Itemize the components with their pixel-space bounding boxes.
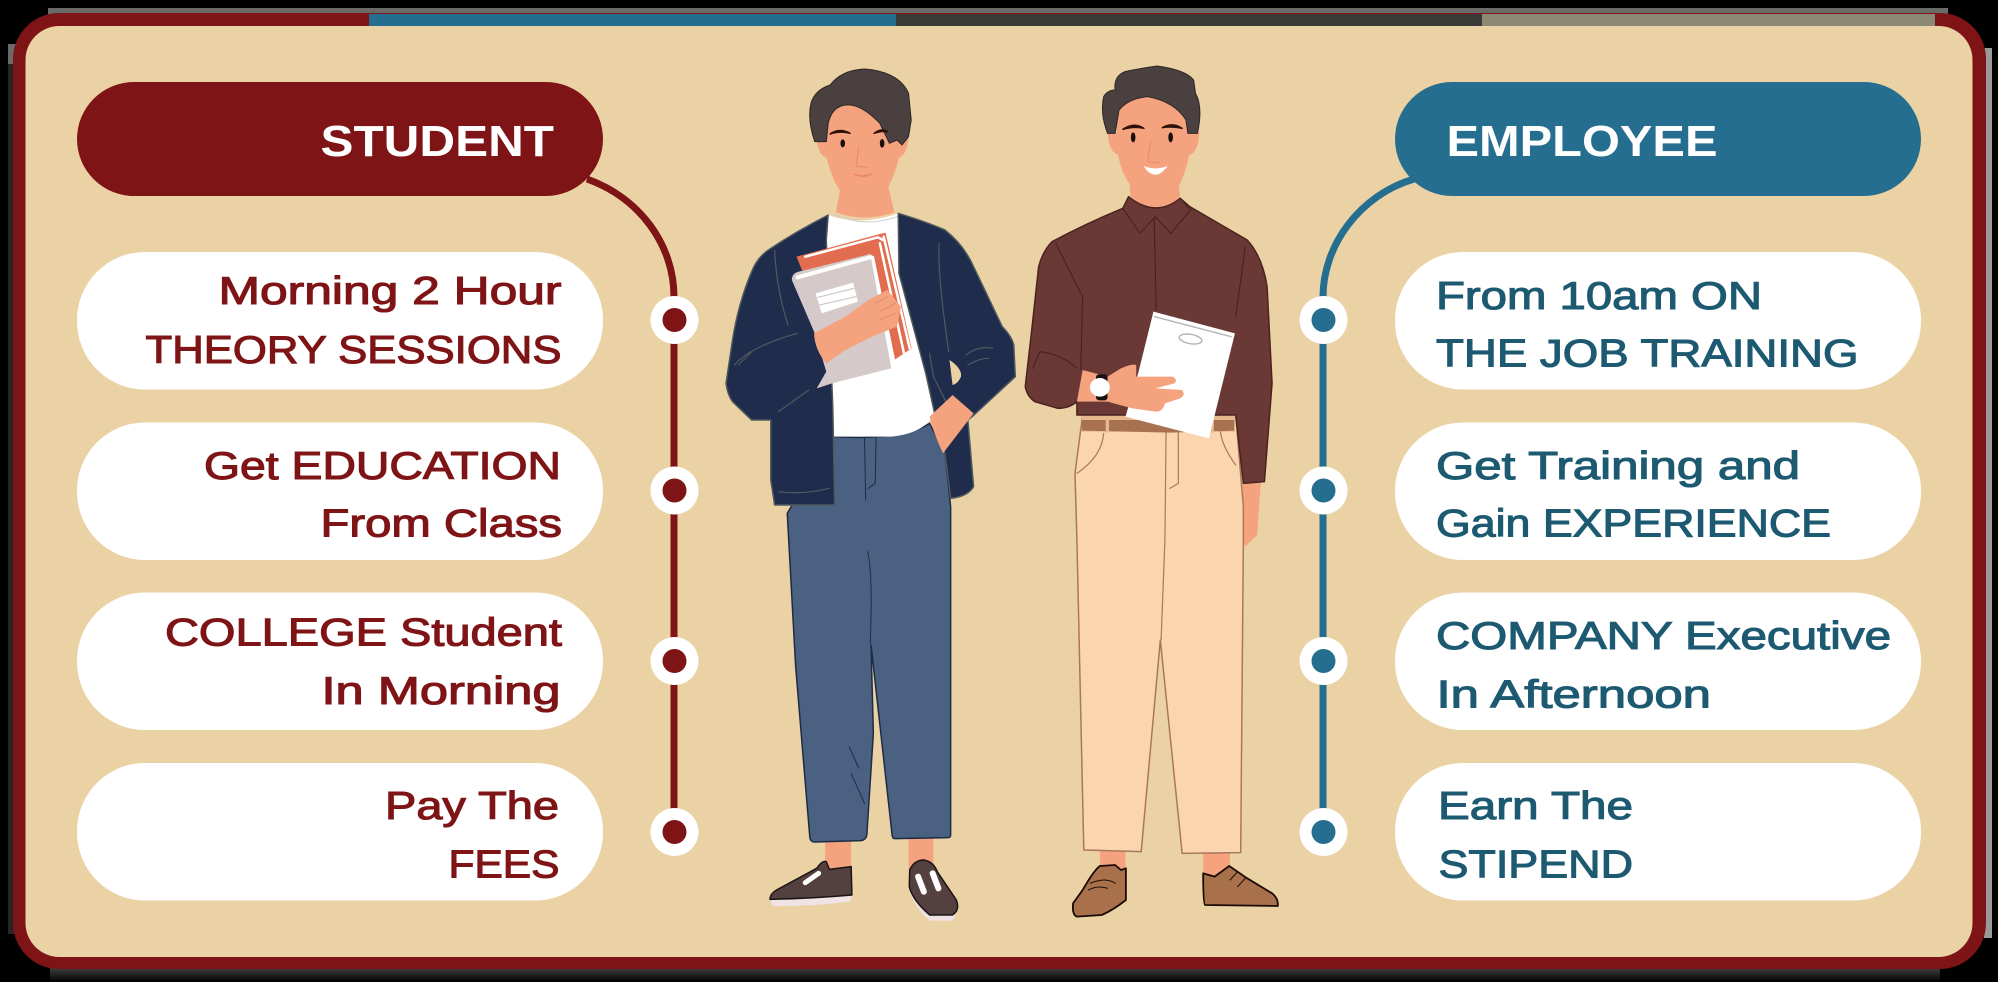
employee facial features xyxy=(1123,125,1182,175)
heading: STUDENT: STUDENT xyxy=(320,117,554,166)
employee left hand at side xyxy=(1243,480,1261,547)
jacket fold lines xyxy=(734,243,993,493)
employee item 4: Earn The xyxy=(1438,785,1633,828)
student jacket right xyxy=(898,213,1015,498)
employee ankles xyxy=(1100,848,1230,877)
student item 3: COLLEGE Student xyxy=(165,612,562,654)
employee notebook xyxy=(1126,312,1235,438)
employee belt xyxy=(1082,415,1235,433)
student trousers xyxy=(787,423,951,842)
employee left shoe xyxy=(1073,865,1126,917)
employee item 3: In Afternoon xyxy=(1436,674,1711,716)
employee connector line xyxy=(1323,179,1414,832)
heading: EMPLOYEE: EMPLOYEE xyxy=(1446,117,1718,166)
heading: EMPLOYEE xyxy=(1395,82,1921,196)
illustration: employee figure xyxy=(1025,66,1278,917)
student facial features xyxy=(830,130,887,176)
student ankles xyxy=(825,835,933,872)
student item 2: Get EDUCATION xyxy=(204,445,561,488)
employee item 3: COMPANY Executive xyxy=(1436,615,1891,658)
employee item 2 xyxy=(1395,422,1921,560)
student red book xyxy=(796,233,912,359)
employee item 1 xyxy=(1395,252,1921,390)
student item 3 xyxy=(77,592,603,730)
student hand in pocket xyxy=(930,395,974,453)
student face xyxy=(823,90,903,203)
employee item 4: STIPEND xyxy=(1438,844,1633,886)
student left shoe xyxy=(770,861,852,906)
student item 1: Morning 2 Hour xyxy=(218,270,562,313)
employee item 1: From 10am ON xyxy=(1436,275,1762,318)
employee item 2: Get Training and xyxy=(1436,445,1800,488)
student jacket left xyxy=(726,215,835,505)
student item 1: THEORY SESSIONS xyxy=(146,329,562,372)
employee item 4 xyxy=(1395,763,1921,900)
student right shoe xyxy=(909,860,958,921)
employee shirt xyxy=(1025,197,1272,483)
student item 1 xyxy=(77,252,603,390)
student neck xyxy=(836,187,894,217)
student ears xyxy=(817,138,909,158)
student connector line xyxy=(587,179,674,832)
employee item 3 xyxy=(1395,592,1921,730)
employee face xyxy=(1117,87,1192,196)
employee wristwatch xyxy=(1090,374,1110,400)
illustration: student figure xyxy=(726,69,1015,921)
employee item 2: Gain EXPERIENCE xyxy=(1436,502,1831,546)
gap under elbow xyxy=(949,360,961,385)
trouser lines xyxy=(1077,432,1236,640)
employee timeline dots xyxy=(1300,296,1348,856)
student item 2: From Class xyxy=(320,502,562,546)
student item 3: In Morning xyxy=(322,670,560,713)
student hair xyxy=(810,69,911,145)
shoe creases xyxy=(1088,872,1245,890)
shirt collar and seams xyxy=(1033,197,1245,370)
student item 4: FEES xyxy=(448,844,560,886)
employee right shoe xyxy=(1203,866,1278,906)
student item 4 xyxy=(77,763,603,900)
employee hair xyxy=(1102,66,1200,133)
employee trousers xyxy=(1075,415,1243,853)
employee ears xyxy=(1108,132,1199,155)
student t-shirt xyxy=(826,213,935,437)
trouser creases xyxy=(849,438,876,803)
employee item 1: THE JOB TRAINING xyxy=(1436,332,1858,376)
student grey book xyxy=(792,253,895,388)
student hand holding books xyxy=(814,290,901,363)
employee neck xyxy=(1129,180,1180,209)
student timeline dots xyxy=(650,296,698,856)
student item 4: Pay The xyxy=(385,785,559,828)
heading: STUDENT xyxy=(77,82,603,196)
employee hand xyxy=(1077,365,1184,412)
student item 2 xyxy=(77,422,603,560)
